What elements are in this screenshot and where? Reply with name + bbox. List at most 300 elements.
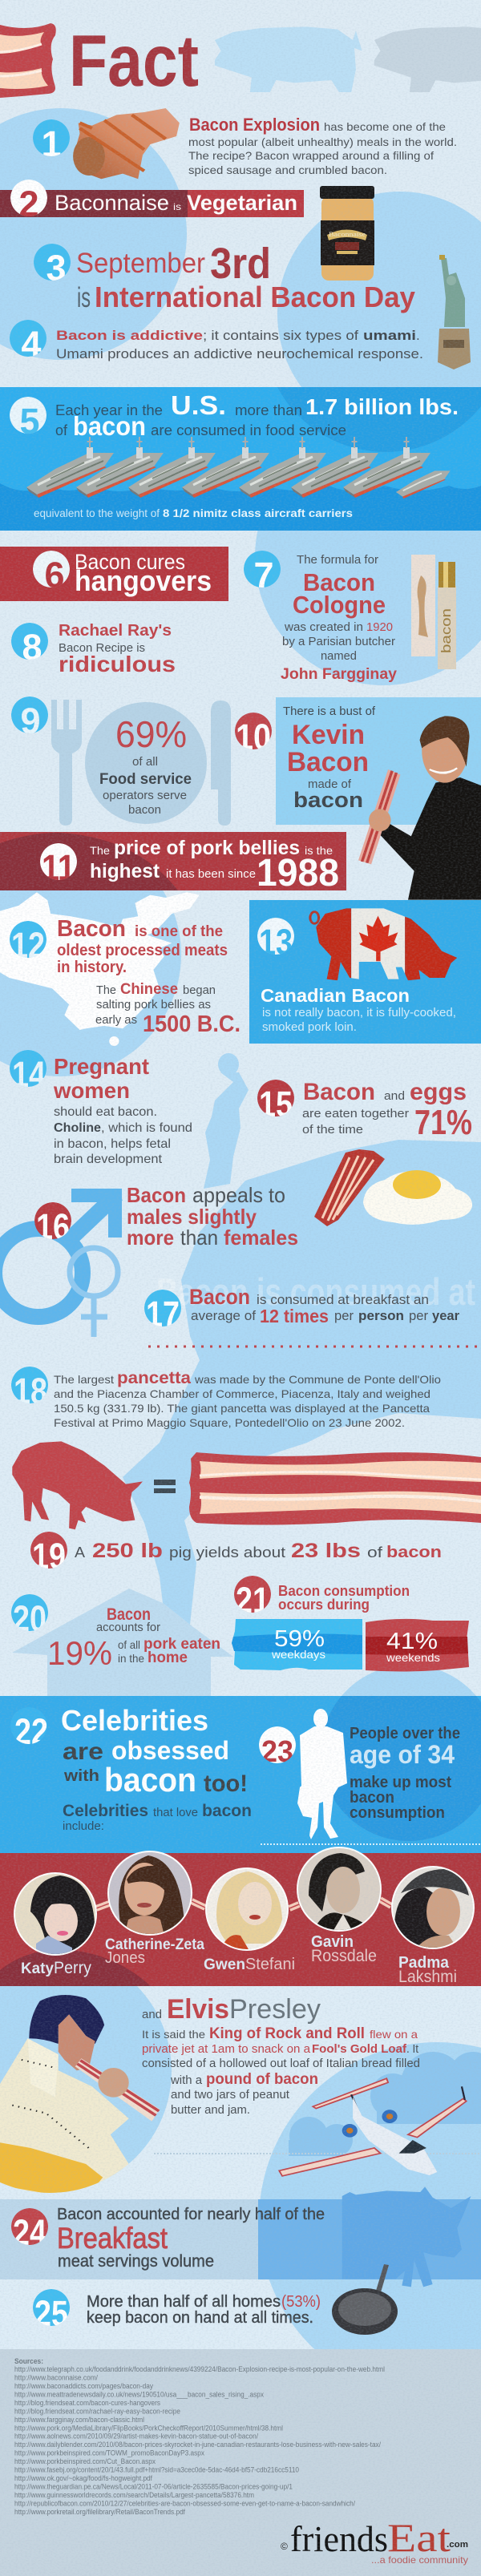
- icon: equals sign: [154, 1480, 176, 1493]
- badge 25: 25: [34, 2293, 68, 2334]
- text: celebrities are obsessed: Celebrities: [61, 1704, 208, 1737]
- badge 17: 17: [146, 1294, 180, 1334]
- text: bacon is addictive: Umami produces an addictive neurochemical response.: [56, 346, 423, 361]
- fact 2 banner: [0, 180, 304, 217]
- text: 19 percent of pork: accounts for: [96, 1621, 160, 1634]
- text: homes keep bacon: keep bacon on hand at all times.: [87, 2309, 313, 2327]
- badge 8: 8: [22, 627, 42, 668]
- text: equivalent weight: equivalent to the weight of: [34, 507, 160, 519]
- text: celebrities that love bacon: bacon: [202, 1802, 252, 1820]
- sources list: http://www.fargginay.com/bacon-classic.html: [14, 2416, 144, 2424]
- photo: kevin bacon holding bacon: [358, 716, 481, 900]
- text: 250 lb pig yields: of: [367, 1544, 383, 1561]
- text: rachael ray: [59, 622, 176, 676]
- badge 11: 11: [42, 847, 75, 888]
- text: celebrities are obsessed: bacon: [104, 1761, 196, 1799]
- text: largest pancetta: [54, 1369, 441, 1429]
- names: Jones: [105, 1949, 145, 1967]
- text: kevin bacon bust: bacon: [293, 788, 363, 812]
- text: bacon explosion: The recipe? Bacon wrapped around a filling of: [188, 149, 434, 162]
- fact 21: [232, 1576, 469, 1672]
- text: chinese 1500 bc: [95, 981, 240, 1037]
- icon: red pig: [12, 1441, 143, 1529]
- text: chinese 1500 bc: began: [183, 983, 216, 997]
- sources list: http://www.telegraph.co.uk/foodanddrink/foodanddrinknews/4399224/Bacon-Explosion-recipe-is-most-popular-on-the-web.html: [14, 2365, 385, 2373]
- text: bacon appeals to males: females: [224, 1225, 298, 1250]
- text: 69 percent: Food service: [99, 771, 192, 788]
- sources list: http://www.baconaddicts.com/pages/bacon-day: [14, 2382, 153, 2390]
- fact 4: [10, 320, 423, 365]
- text: kevin bacon bust: made of: [308, 777, 352, 791]
- pig silhouette blue: [215, 26, 362, 92]
- chart: weekends bar: [366, 1619, 469, 1672]
- icon: fried egg: [363, 1170, 472, 1225]
- text: elvis presley: consisted of a hollowed out loaf of Italian bread filled: [142, 2057, 420, 2070]
- text: 12 times per person: per: [409, 1308, 428, 1323]
- text: 250 lb pig yields: A: [75, 1544, 85, 1561]
- text: pregnant women: brain development: [54, 1153, 163, 1166]
- chart: weekdays bar: [232, 1619, 362, 1670]
- text: bacon explosion: most popular (albeit unhealthy) meals in the world.: [188, 135, 457, 148]
- text: 250 lb pig yields: [75, 1540, 442, 1562]
- names: Perry: [54, 1959, 91, 1977]
- sources list: http://www.porkbeinspired.com/Cut_Bacon.aspx: [14, 2457, 156, 2465]
- text: 19 percent of pork: in the: [118, 1652, 144, 1665]
- text: bacon explosion: spiced sausage and crumbled bacon.: [188, 164, 387, 176]
- text: pregnant women: in bacon, helps fetal: [54, 1137, 171, 1151]
- text: is international bacon day: is: [77, 282, 91, 313]
- icon: frying pan: [332, 2264, 398, 2335]
- text: baconnaise is vegetarian: Baconnaise: [55, 191, 169, 215]
- text: bacon cures hangovers: hangovers: [75, 564, 212, 597]
- text: largest pancetta: Festival at Primo Maggio Square, Pontedell'Olio on 23 June 2002.: [54, 1416, 405, 1429]
- badge 7: [244, 551, 281, 587]
- fact 9: [11, 696, 231, 826]
- text: pork bellies 1988: it has been since: [166, 867, 256, 881]
- text: bacon consumption occurs: occurs during: [278, 1597, 370, 1613]
- text: 250 lb pig yields: 23 lbs: [291, 1540, 361, 1562]
- text: pork bellies 1988: 1988: [257, 852, 339, 894]
- text: celebrities are obsessed: obsessed: [111, 1736, 229, 1765]
- text: 12 times per person: is consumed at breakfast an: [257, 1292, 429, 1307]
- text: bacon cologne: The formula for: [297, 553, 378, 567]
- text: bacon explosion: Bacon Explosion: [189, 115, 320, 135]
- badge 8: [11, 623, 48, 660]
- sources list: http://www.ok.gov/~okag/food/fs-hogweight.pdf: [14, 2474, 152, 2482]
- text: breakfast meat: Breakfast: [57, 2222, 168, 2255]
- text: bacon consumption occurs: [278, 1583, 410, 1613]
- text: 69 percent: bacon: [128, 803, 161, 817]
- text: baconnaise is vegetarian: is: [173, 201, 181, 212]
- text: pregnant women: [53, 1054, 192, 1166]
- text: chinese 1500 bc: early as: [95, 1013, 137, 1027]
- text: largest pancetta: The largest: [54, 1373, 114, 1386]
- icon: big bacon strip: [189, 1452, 481, 1524]
- text: is international bacon day: International Bacon Day: [95, 281, 415, 313]
- icon: baconnaise jar: [320, 186, 374, 281]
- badge 21: 21: [236, 1580, 269, 1621]
- text: 12 times per person: Bacon: [189, 1285, 250, 1309]
- text: canadian bacon: Canadian Bacon: [261, 985, 410, 1006]
- text: 69 percent: operators serve: [103, 789, 187, 802]
- bacon logo: [0, 23, 56, 98]
- text: bacon and eggs 71 percent: eggs: [410, 1079, 467, 1105]
- badge 1: 1: [41, 123, 62, 164]
- text: bacon is addictive: umami: [363, 328, 416, 343]
- text: 1.7 billion lbs: Each year in the: [55, 402, 163, 418]
- fact 14: [10, 1050, 192, 1166]
- icon: pig silhouette dark: [342, 2186, 471, 2287]
- text: breakfast meat: Bacon accounted for nearly half of the: [57, 2206, 325, 2223]
- icon: baconnaise jar: Baconnaise: [329, 231, 366, 238]
- text: pregnant women: , which is found: [101, 1121, 192, 1135]
- badge 7: 7: [253, 555, 274, 596]
- text: kevin bacon bust: Bacon: [287, 747, 369, 777]
- text: 1.7 billion lbs: of: [55, 422, 68, 438]
- text: rachael ray: ridiculous: [59, 652, 176, 676]
- badge 9: 9: [20, 701, 41, 741]
- text: pregnant women: women: [53, 1078, 130, 1103]
- chart: weekdays bar: weekdays: [271, 1648, 325, 1661]
- text: people over 34: People over the: [350, 1725, 460, 1742]
- friendseat logo: friends: [290, 2518, 388, 2559]
- fact 7: [244, 551, 456, 683]
- icon: bacon strips: [314, 1149, 385, 1226]
- text: elvis presley: private jet at 1am to snack on a: [142, 2042, 311, 2056]
- portrait: gavin rossdale: [297, 1847, 382, 1932]
- text: chinese 1500 bc: Chinese: [120, 981, 178, 998]
- badge 12: 12: [11, 925, 45, 966]
- fact 19 illustration: [12, 1441, 481, 1577]
- text: bacon and eggs 71 percent: are eaten together: [302, 1107, 409, 1120]
- badge 3: [34, 244, 71, 281]
- sources list: http://www.porkretail.org/filelibrary/Retail/BaconTrends.pdf: [14, 2508, 185, 2516]
- friendseat logo: Eat: [387, 2515, 451, 2560]
- portrait: gwen stefani: [205, 1867, 289, 1951]
- fact 6 banner: [0, 547, 228, 601]
- badge 20: 20: [13, 1598, 46, 1639]
- badge 13: 13: [259, 922, 293, 963]
- chart: weekdays bar: 59%: [274, 1626, 325, 1652]
- text: bacon cologne: by a Parisian butcher: [282, 635, 395, 648]
- badge 3: 3: [46, 248, 67, 289]
- text: bacon cologne: John Fargginay: [281, 666, 397, 683]
- text: september 3rd: 3rd: [210, 240, 271, 288]
- text: people over 34: [350, 1725, 460, 1822]
- sources list: http://www.dailyblender.com/2010/08/bacon-prices-skyrocket-in-june-canadian-restaurants-lose-business-with-new-sales-tax/: [14, 2441, 381, 2449]
- sources list: http://blog.friendseat.com/rachael-ray-easy-bacon-recipe: [14, 2407, 180, 2415]
- icon: eight and a half aircraft carriers: [26, 437, 451, 499]
- fact 1: [33, 108, 457, 179]
- badge 6: [33, 551, 70, 587]
- text: 12 times per person: 12 times: [260, 1306, 329, 1326]
- text: bacon cologne: Bacon: [303, 568, 375, 596]
- text: 250 lb pig yields: pig yields about: [169, 1544, 285, 1561]
- sources list: http://www.aolnews.com/2010/09/29/artist-makes-kevin-bacon-statue-out-of-bacon/: [14, 2433, 258, 2441]
- text: 1.7 billion lbs: are consumed in food service: [151, 422, 346, 438]
- text: bacon appeals to males: [127, 1183, 298, 1250]
- icon: man silhouette: [297, 1709, 347, 1839]
- fact 8: [11, 622, 176, 676]
- text: chinese 1500 bc: 1500 B.C.: [143, 1011, 240, 1037]
- text: 1.7 billion lbs: U.S.: [171, 390, 226, 420]
- pig silhouette grey: [374, 26, 481, 92]
- text: bacon cures hangovers: Bacon cures: [75, 550, 185, 574]
- text: oldest processed meats: oldest processed meats: [57, 942, 228, 959]
- text: chinese 1500 bc: The: [96, 983, 116, 997]
- names: Stefani: [245, 1956, 295, 1973]
- text: elvis presley: . It: [406, 2042, 419, 2056]
- text: elvis presley: Fool's Gold Loaf: [312, 2042, 407, 2056]
- text: bacon and eggs 71 percent: of the time: [302, 1123, 363, 1137]
- icon: statue of liberty: [438, 255, 471, 369]
- text: september 3rd: September: [76, 248, 205, 279]
- icon: cologne bottle and box: bacon: [439, 608, 454, 653]
- text: elvis presley: [142, 1994, 420, 2117]
- text: bacon is addictive: Bacon is addictive: [56, 328, 203, 343]
- badge 5: [10, 397, 46, 434]
- text: bacon and eggs 71 percent: Bacon: [303, 1079, 375, 1105]
- text: bacon appeals to males: appeals to: [192, 1183, 285, 1207]
- portrait: katy perry: [12, 1871, 100, 1956]
- text: largest pancetta: pancetta: [117, 1369, 191, 1387]
- names: Padma: [398, 1954, 450, 1972]
- text: largest pancetta: and the Piacenza Chamber of Commerce, Piacenza, Italy and weighed: [54, 1387, 430, 1400]
- badge 4: [10, 320, 46, 357]
- text: celebrities that love bacon: Celebrities: [63, 1802, 148, 1820]
- text: 12 times per person: [189, 1285, 459, 1326]
- text: bacon cologne: named: [321, 649, 357, 663]
- text: pork bellies 1988: The: [90, 844, 110, 857]
- text: breakfast meat: meat servings volume: [58, 2252, 214, 2271]
- text: 12 times per person: year: [432, 1308, 459, 1323]
- fact 18: [11, 1367, 441, 1429]
- text: baconnaise is vegetarian: [55, 191, 297, 215]
- text: celebrities are obsessed: [61, 1704, 248, 1799]
- sources list: [14, 2357, 385, 2516]
- badge 10: 10: [236, 717, 271, 757]
- icon: canadian flag pig: [307, 903, 467, 983]
- icon: male symbol: [0, 1189, 122, 1317]
- celebrities panel: [0, 1665, 481, 1853]
- badge 23: 23: [261, 1735, 293, 1769]
- text: 12 times per person: person: [358, 1308, 404, 1323]
- chart: weekends bar: weekends: [386, 1651, 440, 1664]
- fact 11 banner: [0, 832, 346, 894]
- names: Lakshmi: [398, 1968, 457, 1986]
- sources list: http://www.theguardian.pe.ca/News/Local/2011-07-06/article-2635585/Bacon-prices-going-up/1: [14, 2483, 293, 2491]
- text: people over 34: consumption: [350, 1804, 445, 1822]
- text: elvis presley: Presley: [229, 1994, 321, 2025]
- text: oldest processed meats: Bacon: [57, 916, 126, 942]
- photo: elvis presley eating bacon: [0, 1995, 160, 2204]
- text: bacon and eggs 71 percent: [302, 1079, 472, 1142]
- sources list: http://www.pork.org/MediaLibrary/FlipBooks/PorkCheckoffReport/2010Summer/html/38.html: [14, 2424, 283, 2432]
- names: Katy: [21, 1960, 54, 1977]
- text: bacon cures hangovers: [75, 550, 212, 597]
- map of china: [0, 892, 200, 1046]
- fact 15: [257, 1079, 472, 1142]
- names: Rossdale: [311, 1947, 377, 1965]
- sources list: http://www.meattradenewsdaily.co.uk/news/190510/usa___bacon_sales_rising_.aspx: [14, 2390, 264, 2398]
- friendseat logo: .com: [447, 2540, 468, 2550]
- text: equivalent weight: [34, 507, 353, 519]
- text: pregnant women: should eat bacon.: [54, 1105, 157, 1119]
- text: pork bellies 1988: is the: [305, 844, 333, 857]
- text: pork bellies 1988: highest: [90, 860, 160, 882]
- text: elvis presley: It is said the: [142, 2028, 205, 2041]
- text: elvis presley: pound of bacon: [206, 2071, 318, 2088]
- text: bacon cologne: Cologne: [293, 591, 386, 619]
- text: 1.7 billion lbs: 1.7 billion lbs.: [305, 394, 459, 419]
- badge 2: [10, 180, 47, 216]
- text: rachael ray: Bacon Recipe is: [59, 641, 145, 655]
- text: pregnant women: Pregnant: [54, 1054, 149, 1079]
- text: equivalent weight: 8 1/2 nimitz class aircraft carriers: [163, 507, 353, 519]
- friendseat logo: ©: [281, 2541, 288, 2552]
- text: 19 percent of pork: [47, 1605, 220, 1672]
- text: celebrities that love bacon: that love: [153, 1806, 198, 1819]
- text: largest pancetta: was made by the Commune de Ponte dell'Olio: [194, 1373, 441, 1386]
- text: celebrities are obsessed: too!: [204, 1770, 248, 1797]
- text: 12 times per person: average of: [191, 1308, 256, 1323]
- fact 24 band: [0, 2186, 481, 2287]
- badge 1: [33, 119, 70, 156]
- text: oldest processed meats: in history.: [57, 959, 127, 976]
- text: people over 34: age of 34: [350, 1740, 455, 1769]
- portrait: catherine zeta jones: [107, 1851, 192, 1936]
- text: bacon explosion: [188, 115, 457, 176]
- text: homes keep bacon: (53%): [281, 2293, 321, 2311]
- badge 16: 16: [36, 1206, 70, 1247]
- text: bacon appeals to males: more: [127, 1225, 174, 1250]
- sources list: http://www.fasebj.org/content/20/1/43.full.pdf+html?sid=a3cec0de-5dac-46d4-bf57-cdb216cc5110: [14, 2466, 299, 2474]
- text: pregnant women: Choline: [54, 1121, 101, 1135]
- text: pork bellies 1988: [90, 837, 339, 894]
- text: bacon appeals to males: Bacon: [127, 1183, 186, 1207]
- sources list: http://blog.friendseat.com/bacon-cures-hangovers: [14, 2399, 160, 2407]
- fact 25: [33, 2264, 398, 2335]
- text: bacon cologne: [281, 553, 397, 683]
- text: bacon is addictive: .: [416, 328, 420, 343]
- text: bacon appeals to males: than: [180, 1225, 218, 1250]
- text: elvis presley: and: [142, 2008, 162, 2021]
- text: 1.7 billion lbs: more than: [235, 402, 302, 418]
- text: chinese 1500 bc: salting pork bellies as: [96, 998, 211, 1011]
- fact 3: [34, 240, 415, 313]
- text: elvis presley: with a: [170, 2073, 203, 2087]
- names: Gavin: [311, 1933, 354, 1951]
- badge 15: 15: [259, 1084, 293, 1124]
- badge 4: 4: [21, 324, 42, 365]
- text: bacon is addictive: [56, 328, 423, 361]
- text: celebrities are obsessed: are: [63, 1738, 103, 1765]
- text: bacon appeals to males: males slightly: [127, 1205, 257, 1229]
- text: rachael ray: Rachael Ray's: [59, 622, 172, 640]
- text: elvis presley: Elvis: [167, 1994, 229, 2025]
- icon: bacon explosion roll: [73, 108, 180, 179]
- sources panel: [0, 2349, 481, 2576]
- text: bacon consumption occurs: Bacon consumption: [278, 1583, 410, 1599]
- sources list: Sources:: [14, 2357, 43, 2365]
- text: kevin bacon bust: Kevin: [292, 720, 365, 750]
- text: breakfast meat: [57, 2206, 325, 2271]
- badge 18: 18: [14, 1371, 47, 1411]
- icon: fork plate knife: [51, 700, 231, 826]
- icon: plane with bacon wings: [279, 2078, 467, 2176]
- text: 69 percent: 69%: [115, 713, 187, 755]
- text: 69 percent: [99, 713, 192, 817]
- title: Fact: [69, 21, 199, 102]
- badge 24: 24: [13, 2212, 46, 2253]
- text: 69 percent: of all: [132, 755, 158, 769]
- badge 9: [11, 696, 48, 733]
- portrait: padma lakshmi: [391, 1866, 475, 1949]
- sources list: http://www.porkbeinspired.com/TOWM_promoBaconDayP3.aspx: [14, 2449, 204, 2457]
- celebrity portraits panel: [0, 1847, 481, 1986]
- clouds: [289, 2052, 481, 2156]
- text: 250 lb pig yields: 250 lb: [92, 1540, 163, 1562]
- text: 19 percent of pork: 19%: [47, 1634, 112, 1672]
- fact 17: [144, 1285, 459, 1334]
- text: celebrities that love bacon: include:: [63, 1819, 104, 1833]
- sources list: http://www.guinnessworldrecords.com/search/Details/Largest-pancetta/58376.htm: [14, 2491, 254, 2499]
- text: 19 percent of pork: home: [148, 1649, 188, 1666]
- text: baconnaise is vegetarian: Vegetarian: [187, 191, 297, 215]
- badge 14: 14: [12, 1054, 46, 1095]
- text: bacon explosion: has become one of the: [324, 120, 446, 133]
- text: oldest processed meats: is one of the: [135, 923, 223, 940]
- text: canadian bacon: is not really bacon, it is fully-cooked,: [262, 1006, 456, 1019]
- text: pork bellies 1988: price of pork bellies: [114, 837, 300, 859]
- text: people over 34: make up most: [350, 1774, 451, 1791]
- text: september 3rd: [76, 240, 271, 288]
- badge 19: 19: [32, 1536, 66, 1577]
- badge 2: 2: [18, 184, 39, 224]
- text: oldest processed meats: [57, 916, 228, 976]
- text: celebrities that love bacon: [63, 1802, 252, 1833]
- badge 6: 6: [44, 555, 65, 596]
- text: elvis presley: King of Rock and Roll: [209, 2025, 365, 2042]
- names: [21, 1933, 457, 1986]
- fact 20: [11, 1594, 220, 1672]
- text: bacon cologne: 1920: [366, 620, 393, 634]
- text: elvis presley: flew on a: [370, 2028, 418, 2041]
- text: elvis presley: butter and jam.: [171, 2103, 250, 2117]
- text: homes keep bacon: More than half of all homes: [87, 2293, 281, 2311]
- fact 13 panel: [249, 900, 481, 1044]
- sources list: http://republicofbacon.com/2010/12/27/celebrities-are-bacon-obsessed-some-even-get-to-name-a-bacon-sandwhich/: [14, 2499, 355, 2507]
- text: 19 percent of pork: of all: [118, 1638, 140, 1651]
- text: bacon and eggs 71 percent: and: [384, 1089, 405, 1103]
- text: largest pancetta: 150.5 kg (331.79 lb). The giant pancetta was displayed at the Pancetta: [54, 1402, 430, 1415]
- fact 12: [10, 916, 240, 1037]
- fact 16: [0, 1183, 298, 1337]
- house silhouette: [12, 1589, 233, 1696]
- text: canadian bacon: smoked pork loin.: [262, 1020, 357, 1034]
- chart: weekends bar: 41%: [386, 1629, 438, 1654]
- text: elvis presley: and two jars of peanut: [171, 2088, 290, 2102]
- text: people over 34: bacon: [350, 1789, 394, 1807]
- text: 1.7 billion lbs: bacon: [73, 411, 146, 441]
- text: canadian bacon: [261, 985, 456, 1034]
- text: kevin bacon bust: [283, 705, 376, 812]
- pregnant woman silhouette: [204, 1053, 249, 1189]
- badge 22: 22: [14, 1711, 48, 1752]
- text: kevin bacon bust: There is a bust of: [283, 705, 376, 718]
- text: homes keep bacon: [87, 2293, 321, 2327]
- text: 19 percent of pork: Bacon: [107, 1605, 151, 1624]
